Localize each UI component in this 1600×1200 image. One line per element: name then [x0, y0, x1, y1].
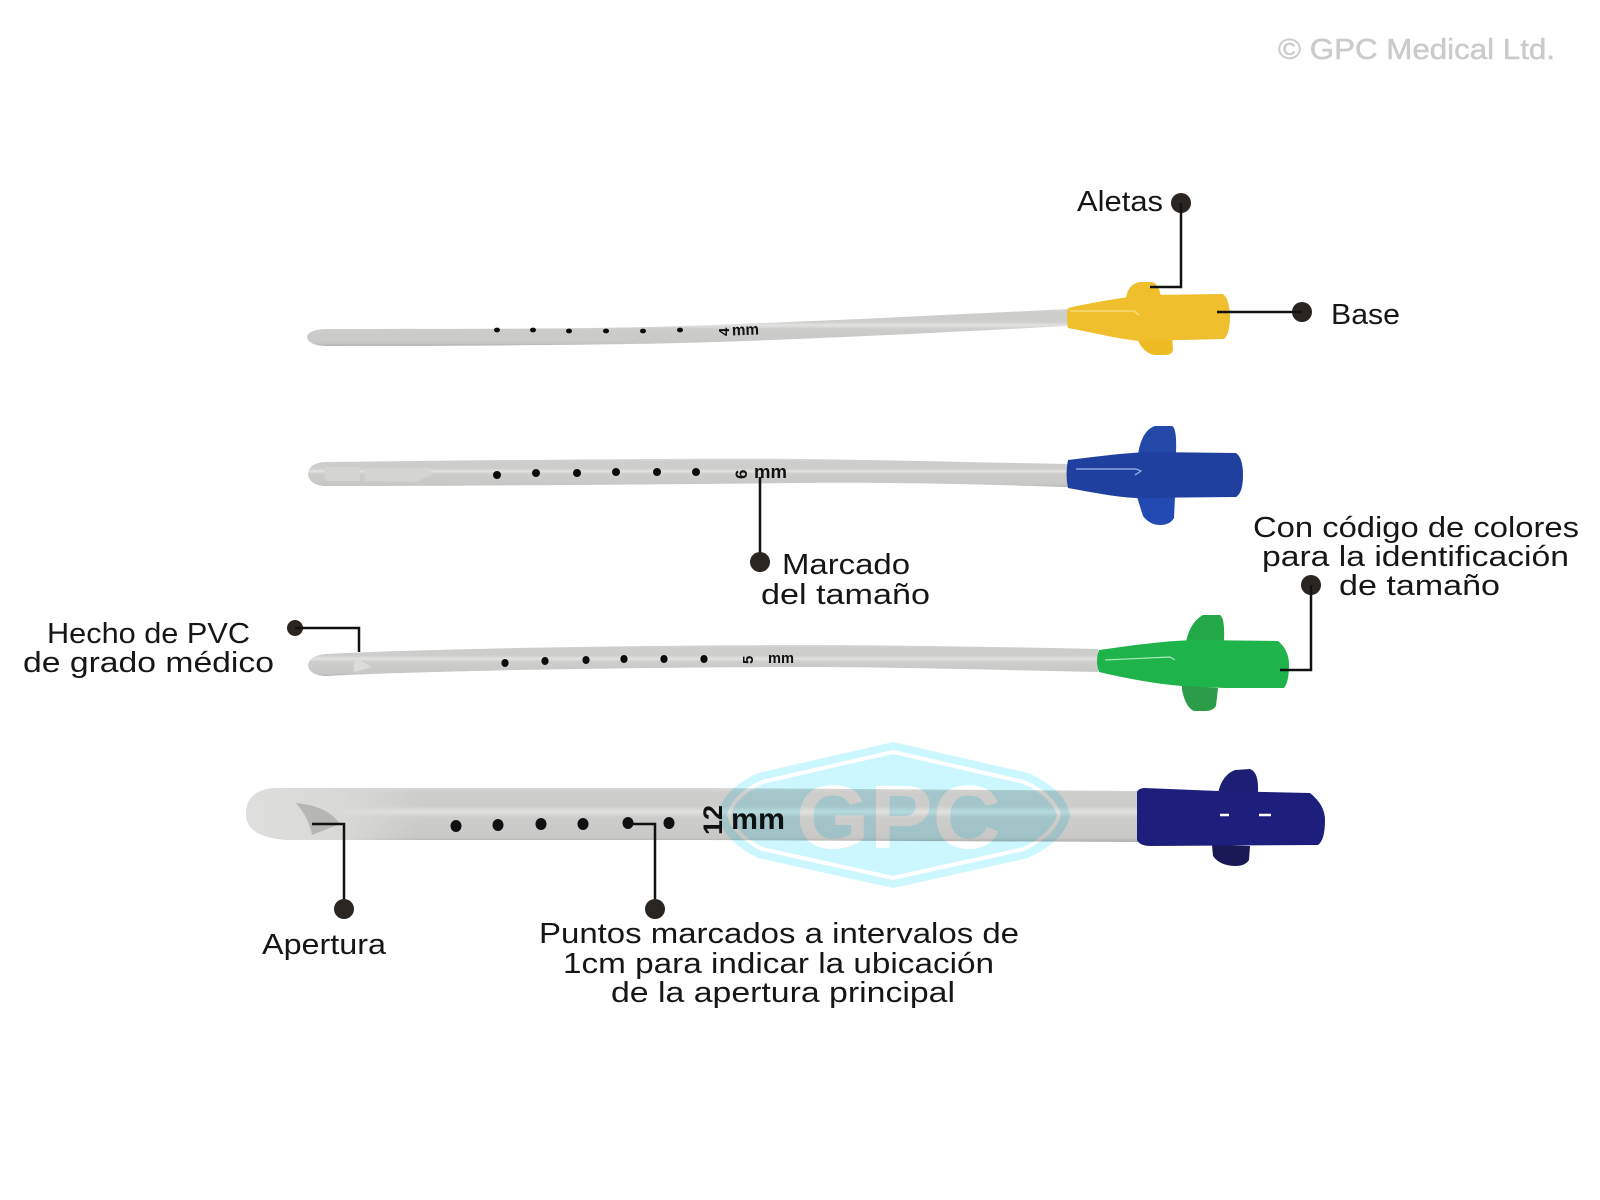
callout: Con código de colores: para la identificación: [1262, 541, 1569, 573]
size marking: 6: [732, 470, 751, 479]
tube: [308, 459, 1068, 487]
lumen tip: [325, 467, 432, 482]
callout: Hecho de PVC: Hecho de PVC: [47, 618, 250, 650]
catheter 4: navy 12 mm: [246, 769, 1325, 866]
callout: Marcado del tamaño: [750, 477, 930, 611]
depth dots: [450, 817, 674, 832]
blue hub: [1066, 426, 1243, 525]
navy hub: [1137, 769, 1325, 866]
callout: Marcado del tamaño: Marcado: [782, 549, 910, 581]
tube: [307, 309, 1068, 346]
size marking: mm: [731, 803, 785, 836]
yellow hub: [1067, 282, 1230, 355]
size marking: mm: [768, 650, 794, 667]
catheter 3: green 5 mm: [308, 615, 1289, 711]
callout: Hecho de PVC: [23, 618, 359, 679]
size marking: 5: [740, 656, 757, 664]
callout: Marcado del tamaño: del tamaño: [761, 579, 930, 611]
callout: Apertura: Apertura: [262, 929, 386, 961]
catheter 2: blue 6 mm: [308, 426, 1243, 525]
opening: [296, 803, 340, 835]
opening tip: [354, 657, 372, 672]
size marking: 12: [698, 805, 728, 835]
callout: Apertura: [262, 824, 386, 961]
callout: Aletas: Aletas: [1077, 186, 1163, 218]
callout: Hecho de PVC: de grado médico: [23, 647, 274, 679]
size marking: mm: [732, 322, 759, 339]
callout: Con código de colores: de tamaño: [1339, 570, 1500, 602]
callout: Base: Base: [1331, 299, 1400, 331]
copyright notice: © GPC Medical Ltd.: [1278, 34, 1555, 66]
size marking: [732, 462, 787, 482]
depth dots: [493, 468, 700, 479]
depth dots: [494, 328, 683, 333]
GPC watermark: [718, 742, 1070, 888]
callout: Aletas: [1077, 186, 1191, 287]
size marking: [698, 803, 785, 836]
depth dots: [501, 655, 708, 667]
size marking: [716, 322, 759, 339]
callout: Puntos marcados: [539, 824, 1019, 1009]
catheter 1: yellow 4 mm: [307, 282, 1230, 355]
lighter rounded tip: [246, 788, 420, 840]
callout: Puntos marcados: de la apertura principal: [611, 977, 955, 1009]
callout: Con código de colores: Con código de colores: [1253, 512, 1579, 544]
callout: Base: [1217, 299, 1400, 331]
callout: Puntos marcados: Puntos marcados a intervalos de: [539, 918, 1019, 950]
green hub: [1097, 615, 1289, 711]
tube: [246, 788, 1140, 842]
callout: Puntos marcados: 1cm para indicar la ubicación: [563, 948, 994, 980]
callout: Con código de colores: [1253, 512, 1579, 670]
size marking: 4: [716, 327, 733, 336]
size marking: [740, 650, 794, 667]
tube: [308, 645, 1098, 676]
GPC watermark: GPC: [796, 768, 1001, 868]
size marking: mm: [754, 462, 787, 482]
